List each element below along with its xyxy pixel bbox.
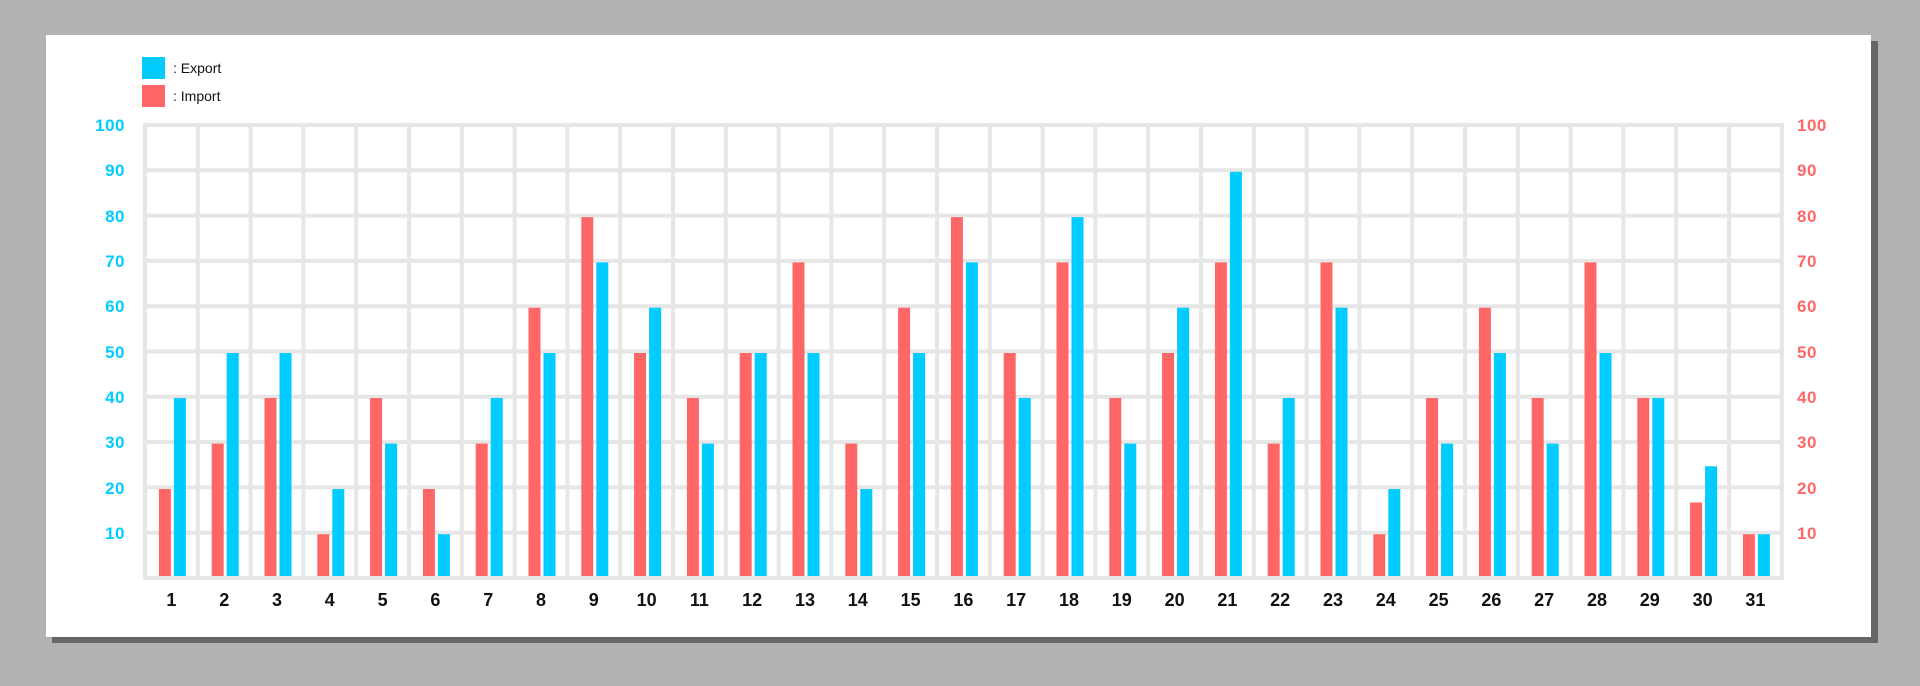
left axis labels: 60 [105,297,125,316]
x axis labels: 17 [1006,590,1026,610]
x axis labels: 5 [378,590,388,610]
right axis labels: 70 [1797,252,1817,271]
legend: : Export [173,60,221,76]
x axis labels: 26 [1481,590,1501,610]
legend [142,57,221,107]
x axis labels: 2 [219,590,229,610]
x axis labels: 9 [589,590,599,610]
left axis labels: 70 [105,252,125,271]
left axis labels: 50 [105,343,125,362]
right axis labels: 40 [1797,388,1817,407]
x axis labels: 15 [901,590,921,610]
right axis labels: 80 [1797,207,1817,226]
left axis labels: 30 [105,433,125,452]
x axis labels [166,590,1765,610]
x axis labels: 18 [1059,590,1079,610]
right axis labels: 50 [1797,343,1817,362]
left axis labels [95,116,125,543]
x axis labels: 28 [1587,590,1607,610]
legend: : Import [173,88,221,104]
right axis labels: 90 [1797,161,1817,180]
x axis labels: 25 [1429,590,1449,610]
x axis labels: 3 [272,590,282,610]
x axis labels: 14 [848,590,868,610]
left axis labels: 90 [105,161,125,180]
x axis labels: 7 [483,590,493,610]
x axis labels: 1 [166,590,176,610]
left axis labels: 100 [95,116,125,135]
bars [159,172,1770,576]
x axis labels: 20 [1165,590,1185,610]
x axis labels: 21 [1217,590,1237,610]
right axis labels: 60 [1797,297,1817,316]
x axis labels: 10 [637,590,657,610]
x axis labels: 8 [536,590,546,610]
x axis labels: 22 [1270,590,1290,610]
left axis labels: 20 [105,479,125,498]
x axis labels: 12 [742,590,762,610]
x axis labels: 6 [430,590,440,610]
left axis labels: 80 [105,207,125,226]
x axis labels: 27 [1534,590,1554,610]
x axis labels: 16 [953,590,973,610]
right axis labels: 10 [1797,524,1817,543]
x axis labels: 23 [1323,590,1343,610]
x axis labels: 4 [325,590,335,610]
grid [143,123,1784,580]
right axis labels: 20 [1797,479,1817,498]
x axis labels: 31 [1745,590,1765,610]
x axis labels: 13 [795,590,815,610]
left axis labels: 10 [105,524,125,543]
x axis labels: 29 [1640,590,1660,610]
right axis labels [1797,116,1827,543]
right axis labels: 30 [1797,433,1817,452]
right axis labels: 100 [1797,116,1827,135]
left axis labels: 40 [105,388,125,407]
x axis labels: 11 [690,590,709,610]
x axis labels: 24 [1376,590,1396,610]
x axis labels: 30 [1693,590,1713,610]
x axis labels: 19 [1112,590,1132,610]
